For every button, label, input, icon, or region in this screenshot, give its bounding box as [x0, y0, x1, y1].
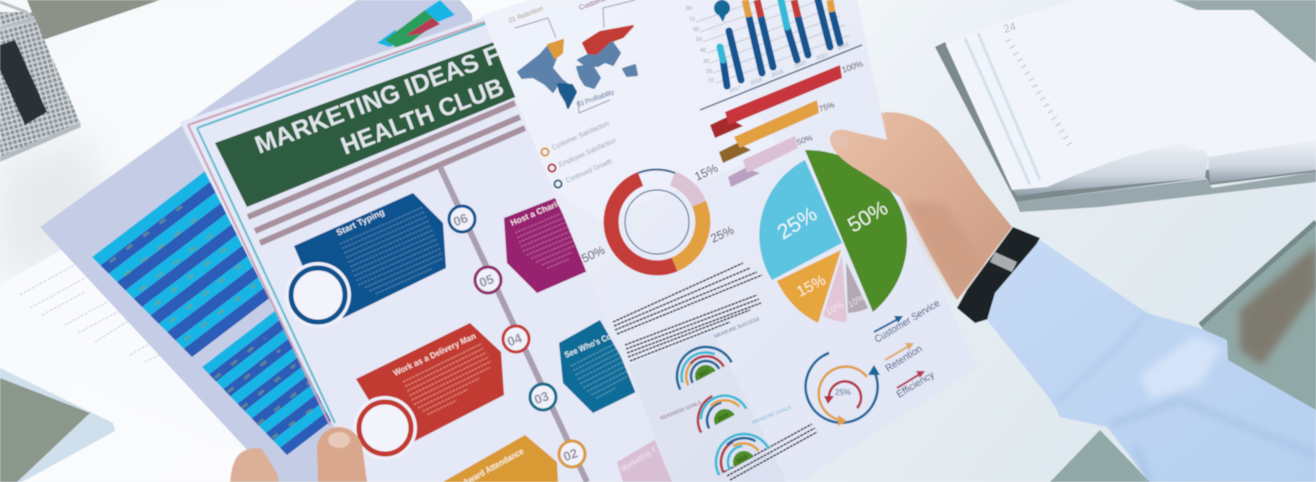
- center value: 25%: [835, 388, 851, 397]
- pie chart: [759, 150, 907, 323]
- back sheet: data tables: [40, 0, 500, 482]
- orange slice: [777, 250, 841, 323]
- bars cyan: [720, 0, 787, 60]
- page stack left: [1012, 143, 1208, 196]
- gauge 2019: [706, 424, 769, 475]
- callout body: [515, 212, 583, 274]
- Eurasia: [578, 42, 620, 66]
- tablet: [0, 368, 115, 482]
- tablet frame: [0, 368, 115, 482]
- title line 1: MARKETING IDEAS FOR: [251, 27, 539, 160]
- pink segment: [673, 179, 699, 204]
- table block 2: [202, 267, 417, 455]
- label retention: 01 Retention: [508, 5, 544, 25]
- gauge 2018: [688, 385, 746, 433]
- table block 1: [92, 143, 342, 357]
- timeline: [440, 167, 587, 482]
- title stripes: [248, 103, 525, 243]
- orange ribbon tail: [719, 143, 751, 163]
- callout heading: Marketing Y: [619, 445, 658, 474]
- callout ring: [285, 262, 351, 328]
- date: 24: [1002, 21, 1018, 36]
- customer service: Customer Service: [873, 298, 942, 346]
- front sheet: [482, 0, 977, 482]
- grid lines: [696, 0, 850, 83]
- thumbnail: [328, 432, 350, 448]
- marker 03: 03: [532, 388, 551, 407]
- bars red: [757, 0, 798, 17]
- sheet paper: [180, 8, 710, 482]
- sleeve: [987, 240, 1316, 482]
- marker 06: 06: [451, 210, 470, 229]
- rim: [0, 2, 34, 28]
- document page: [0, 245, 250, 455]
- pin: [714, 0, 730, 22]
- axis numbers: [686, 6, 714, 84]
- key legend: [873, 298, 942, 401]
- world map: [508, 0, 637, 113]
- marker 04: 04: [505, 330, 525, 349]
- label profitability: 03 Profitability: [576, 89, 616, 109]
- callout body: [340, 207, 447, 299]
- shirt sleeve: [987, 240, 1316, 482]
- cyan slice: [759, 160, 842, 280]
- axis numbers: 20: [706, 69, 712, 75]
- Greenland: [548, 40, 563, 58]
- callout heading: Work as a Delivery Man: [392, 331, 477, 378]
- step 01: [617, 438, 680, 482]
- efficiency: Efficiency: [895, 370, 937, 401]
- label 15%: 15%: [692, 161, 720, 184]
- continued growth: Continued Growth: [565, 158, 614, 185]
- hand behind right: [875, 112, 1012, 300]
- Australia: [623, 65, 637, 76]
- orange callout: [443, 435, 558, 482]
- title line 2: HEALTH CLUB: [337, 73, 508, 161]
- ribbon bars: [710, 58, 865, 187]
- label grey 10%: 10%: [846, 292, 867, 310]
- label 50%: 50%: [796, 133, 814, 147]
- red ribbon tail: [710, 117, 743, 138]
- years: [729, 42, 850, 95]
- red arrow: [829, 381, 861, 408]
- label third gauge: MEASURE GOALS: [752, 405, 792, 426]
- label 25%: 25%: [708, 223, 736, 246]
- label 100%: 100%: [840, 58, 865, 75]
- circular arrows: [806, 353, 880, 426]
- label reassess goals: REASSESS GOALS: [660, 400, 702, 422]
- table cell values: [110, 200, 318, 438]
- report text paragraphs: [613, 263, 817, 480]
- pink callout: [617, 438, 680, 482]
- sleeve folds: [1110, 400, 1316, 482]
- axis numbers: 40: [700, 48, 706, 54]
- years: 2022: [837, 42, 850, 52]
- top table fragment: [377, 30, 405, 47]
- hand right: [829, 112, 1012, 300]
- page edges: [965, 33, 1040, 185]
- floor top right: [1173, 0, 1316, 63]
- cover: [935, 42, 1316, 202]
- green slice: [805, 150, 907, 312]
- thin arc: [638, 170, 675, 173]
- retention: Retention: [884, 343, 924, 375]
- cyan border: [197, 22, 490, 423]
- step 06: [285, 193, 475, 328]
- callout heading: Start Typing: [335, 207, 386, 238]
- axis numbers: 10: [708, 78, 714, 84]
- thumbnail: [829, 132, 851, 150]
- step 04: [353, 323, 529, 460]
- orange ribbon: [734, 100, 819, 148]
- shadow: [1016, 172, 1316, 212]
- axis numbers: 60: [693, 27, 699, 33]
- North America: [518, 46, 570, 92]
- red ribbon: [725, 65, 842, 125]
- Africa: [577, 65, 600, 88]
- column chart: [686, 0, 862, 110]
- gauge 2018: 2018: [717, 412, 730, 423]
- legend: [541, 120, 618, 188]
- axis numbers: 70: [689, 17, 695, 23]
- red segment: [611, 179, 675, 268]
- document under sheets: [0, 245, 250, 455]
- desk glare: [0, 135, 125, 280]
- gauge 2017: 2017: [698, 368, 711, 379]
- callout body: [403, 343, 500, 418]
- axis numbers: 30: [703, 59, 709, 65]
- years: 2017: [729, 85, 742, 95]
- map leader lines: [515, 0, 635, 113]
- dark floor top left: [27, 0, 160, 40]
- palm shading: [905, 200, 985, 295]
- gauge 2019: 2019: [736, 454, 749, 465]
- teal callout: [559, 320, 640, 413]
- back hand thumb, left: [230, 427, 367, 482]
- marker 06: [449, 206, 475, 232]
- mesh body: [0, 12, 80, 157]
- marker 02: [559, 441, 585, 467]
- page stack right: [1208, 140, 1316, 183]
- pen cup: [0, 2, 81, 162]
- bars blue: [723, 0, 840, 86]
- pink slice: [823, 255, 847, 322]
- pink border: [188, 20, 490, 425]
- document lines: [20, 262, 180, 362]
- donut chart: [579, 161, 736, 268]
- pages: [946, 0, 1316, 190]
- tablet screen: [0, 378, 90, 482]
- blue arrow: [806, 353, 878, 423]
- axis numbers: 50: [696, 37, 702, 43]
- bars orange: [745, 0, 832, 17]
- palm: [230, 448, 279, 482]
- orange segment: [675, 204, 703, 264]
- top table cyan: [425, 0, 455, 22]
- label 25%: 25%: [773, 202, 821, 244]
- years: 2021: [816, 52, 829, 62]
- title band: [215, 38, 520, 207]
- label 50%: 50%: [844, 196, 892, 237]
- employee satisfaction: Employee Satisfaction: [558, 137, 618, 169]
- base: [0, 122, 81, 162]
- red callout: [356, 323, 504, 442]
- marker 04: [503, 326, 529, 352]
- Russia: [583, 26, 633, 55]
- years: 2018: [750, 77, 763, 87]
- callout heading: See Who's Coming: [563, 324, 629, 360]
- title: [251, 27, 539, 161]
- dark item: [0, 40, 47, 125]
- health club sheet: [180, 8, 710, 482]
- thumb: [317, 427, 367, 482]
- cuff fold: [1053, 313, 1147, 403]
- callout heading: Host a Charity: [509, 196, 565, 228]
- pink ribbon tail: [728, 168, 760, 187]
- top table red: [405, 18, 440, 36]
- back sheet paper: [40, 0, 500, 482]
- step 03: [530, 320, 643, 413]
- axis numbers: 80: [686, 6, 692, 12]
- axis: [700, 45, 862, 110]
- ruled lines: [1008, 40, 1070, 145]
- years: 2019: [771, 69, 784, 79]
- thumb and palm: [830, 112, 1012, 300]
- fold shade: [628, 332, 787, 482]
- inner ring: [625, 190, 689, 254]
- label 15%: 15%: [794, 272, 829, 301]
- top table green: [385, 10, 438, 50]
- paper: [482, 0, 977, 482]
- gauge 2017: [667, 337, 732, 390]
- pink ribbon: [743, 136, 798, 173]
- open notebook: [935, 0, 1316, 212]
- label 50%: 50%: [579, 243, 607, 266]
- years: 2020: [794, 60, 807, 70]
- customer satisfaction: Customer Satisfaction: [551, 120, 611, 152]
- strap: [957, 227, 1040, 323]
- table edge: [1200, 222, 1316, 325]
- sleeve highlight: [1140, 335, 1222, 400]
- callout ring: [353, 396, 417, 460]
- floor shadow patch: [1240, 245, 1316, 365]
- marker 02: 02: [561, 445, 580, 464]
- blue callout: [294, 193, 446, 318]
- orange arrow: [819, 367, 867, 420]
- floor bottom right: [1050, 222, 1316, 482]
- marker 05: 05: [477, 271, 496, 290]
- grey slice: [846, 262, 868, 313]
- label measure success: MEASURE SUCCESS: [714, 316, 760, 340]
- purple callout: [504, 198, 590, 293]
- label pink 10%: 10%: [824, 299, 845, 317]
- South America: [558, 84, 576, 108]
- buckle: [990, 252, 1017, 272]
- callout body: [571, 339, 643, 402]
- step 02: [443, 435, 585, 482]
- label 75%: 75%: [818, 100, 836, 114]
- watch: [957, 227, 1040, 323]
- step 05: [475, 196, 590, 293]
- highlight: [482, 0, 780, 220]
